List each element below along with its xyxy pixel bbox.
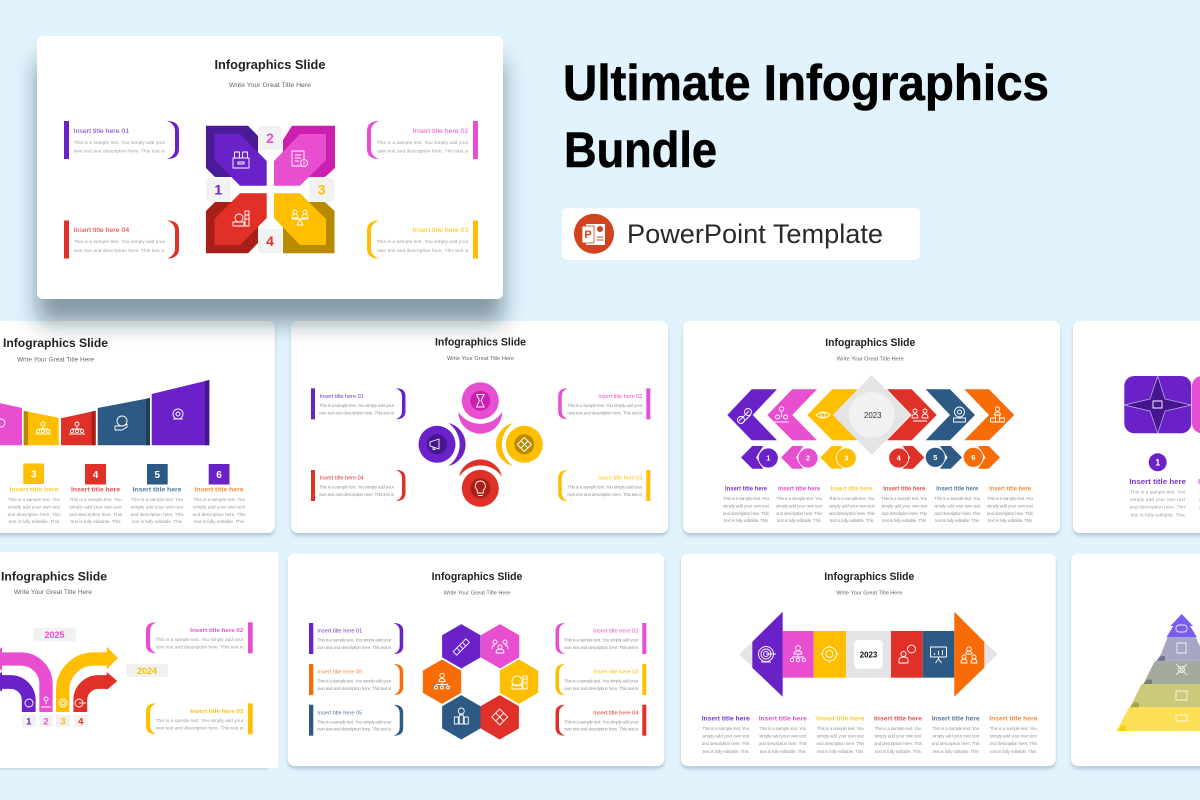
callout 01: This is a sample text. You simply add your (74, 140, 166, 145)
heading: crescent circles slide: Infographics Slide (435, 337, 526, 349)
step 1 with text: simply add your own text (1130, 497, 1186, 502)
six columns text: and description here. This (934, 511, 981, 516)
large chevrons (727, 389, 1014, 440)
heading: chevrons slide: Infographics Slide (825, 337, 915, 349)
callouts: hexagon slide right: own text and description here. This text is (564, 686, 639, 691)
steps 3 to 6: and description here. This (8, 512, 61, 517)
panel: crescent circles slide (291, 321, 668, 533)
callouts: curved arrows slide: This is a sample text. You simply add your (156, 637, 244, 642)
main title (563, 55, 1049, 178)
six columns text: This is a sample text. You (817, 726, 864, 731)
diagram: crescent circles (418, 382, 543, 507)
steps 3 to 6: text is fully editable. This (132, 519, 183, 524)
panel: hexagon ring slide (288, 554, 664, 766)
six columns text: text is fully editable. This (933, 749, 979, 754)
six columns text: simply add your own text (934, 504, 981, 508)
six columns text: Insert title here (831, 486, 873, 492)
steps 3 to 6: and description here. This (69, 512, 123, 517)
callout 03: Insert title here 03 (413, 227, 469, 234)
six columns text: simply add your own text (987, 504, 1034, 508)
number tiles 1 to 4: 4 (78, 716, 84, 728)
callouts: hexagon slide right: This is a sample text. You simply add your (564, 719, 639, 724)
six columns text: and description here. This (723, 511, 770, 516)
steps 3 to 6: text is fully editable. This (194, 519, 245, 524)
steps 3 to 6: and description here. This (192, 512, 246, 517)
steps 3 to 6: Insert title here (10, 486, 59, 494)
six columns text: text is fully editable. This (817, 749, 864, 754)
chart: stepped bars (0, 380, 209, 445)
callouts: crescent circles slide: This is a sample text. You simply add your (319, 403, 394, 408)
six columns text: Insert title here (936, 486, 979, 492)
subheading: hero slide: Write Your Great Title Here (229, 82, 311, 89)
six columns text: simply add your own text (776, 504, 823, 508)
six columns text: Insert title here (932, 716, 980, 723)
callouts: hexagon slide right: own text and description here. This text is (564, 645, 639, 650)
six columns text: text is fully editable. This (990, 749, 1037, 754)
callouts: hexagon slide left: This is a sample text. You simply add your (317, 719, 392, 724)
six columns text: and description here. This (829, 511, 875, 516)
six columns text (723, 486, 1034, 523)
step 1 with text: 1 (1155, 458, 1160, 468)
six columns text: This is a sample text. You (702, 726, 750, 731)
callouts: hexagon slide left: This is a sample text. You simply add your (317, 679, 392, 684)
panel: arrow band slide (681, 554, 1056, 766)
callouts: curved arrows slide: Insert title here 03 (190, 709, 244, 715)
panel: hero quadrant slide (37, 36, 503, 299)
callout 02 (367, 121, 478, 159)
panel: star tiles slide (cropped) (1073, 321, 1200, 533)
panel: chevrons 2023 slide (683, 321, 1060, 533)
six columns text: Insert title here (883, 486, 926, 492)
callouts: crescent circles slide: This is a sample text. You simply add your (319, 485, 394, 490)
six columns text: simply add your own text (990, 734, 1038, 739)
steps 3 to 6: and description here. This (130, 512, 184, 517)
callouts: hexagon slide right: Insert title here 02 (593, 629, 638, 635)
callouts: hexagon slide left: Insert title here 01 (317, 629, 362, 635)
six columns text: Insert title here (778, 486, 821, 492)
six columns text: and description here. This (702, 741, 750, 746)
six columns text: simply add your own text (932, 734, 980, 739)
six columns text: simply add your own text (829, 504, 875, 508)
small numbered chevrons: 3 (844, 454, 848, 463)
callouts: hexagon slide left: own text and description here. This text is (317, 727, 392, 732)
step 1 with text: This is a sample text. You (1130, 489, 1186, 494)
year diamond 2023: 2023 (864, 411, 882, 420)
six columns text: Insert title here (874, 716, 922, 723)
small numbered chevrons: 2 (806, 454, 810, 463)
six columns text: Insert title here (989, 486, 1032, 492)
six columns text: text is fully editable. This (724, 518, 769, 523)
callout 02: Insert title here 02 (413, 128, 469, 135)
callouts: crescent circles slide: Insert title here 01 (320, 394, 364, 400)
callouts: hexagon slide right: This is a sample text. You simply add your (564, 638, 639, 643)
steps 3 to 6: simply add your own text (70, 504, 122, 509)
year tags: 2025 (44, 630, 65, 640)
six columns text: and description here. This (759, 741, 807, 746)
callouts: crescent circles slide: Insert title here 02 (598, 394, 642, 400)
six columns text: This is a sample text. You (776, 496, 822, 501)
small numbered chevrons: 4 (897, 454, 902, 463)
callouts: crescent circles slide: This is a sample text. You simply add your (567, 485, 643, 490)
callouts: hexagon slide right: This is a sample text. You simply add your (564, 679, 639, 684)
small numbered chevrons: 1 (766, 454, 770, 463)
step 1 with text (1129, 453, 1200, 517)
callouts: crescent circles slide: Insert title here 03 (598, 476, 642, 482)
steps 3 to 6: Insert title here (194, 486, 244, 494)
small numbered chevrons: 5 (933, 453, 937, 462)
callouts: hexagon slide left (309, 623, 403, 736)
number tiles 1 to 4 (22, 715, 88, 728)
callout 03: This is a sample text. You simply add your (377, 239, 469, 244)
heading: curved arrows slide: Infographics Slide (1, 569, 107, 583)
callouts: curved arrows slide: own text and description here. This text is (156, 644, 244, 649)
six columns text: text is fully editable. This (875, 749, 922, 754)
callouts: crescent circles slide: own text and description here. This text is (567, 410, 643, 415)
callouts: curved arrows slide: own text and description here. This text is (156, 725, 244, 730)
six columns text: This is a sample text. You (932, 726, 980, 731)
six columns text: This is a sample text. You (934, 496, 981, 501)
six columns text: Insert title here (816, 716, 865, 723)
subheading: arrow band slide: Write Your Great Title Here (836, 590, 902, 596)
six columns text: This is a sample text. You (990, 726, 1037, 731)
badge label: PowerPoint Template (627, 219, 883, 249)
heading: stepped bars slide: Infographics Slide (3, 336, 108, 350)
six columns text: and description here. This (932, 741, 980, 746)
six columns text: This is a sample text. You (759, 726, 807, 731)
callouts: crescent circles slide: This is a sample text. You simply add your (567, 403, 643, 408)
callout 04: This is a sample text. You simply add your (74, 239, 166, 244)
number tiles 1 to 4 (206, 126, 334, 253)
callouts: hexagon slide right: own text and description here. This text is (564, 727, 639, 732)
callouts: hexagon slide right: Insert title here 03 (593, 670, 638, 676)
six columns text: text is fully editable. This (935, 518, 980, 523)
diagram: hexagon ring (423, 624, 538, 740)
year tags (33, 628, 168, 677)
heading: hexagon slide: Infographics Slide (432, 571, 522, 583)
callout 03: own text and description here. This text is (377, 248, 469, 253)
number tiles 1 to 4: 1 (214, 182, 222, 198)
number tiles 1 to 4: 2 (43, 716, 49, 728)
six columns text (702, 716, 1038, 754)
callouts: crescent circles slide: own text and description here. This text is (319, 492, 395, 497)
callout 04: own text and description here. This text is (74, 248, 165, 253)
six columns text: and description here. This (989, 741, 1038, 746)
icon: PowerPoint logo (574, 214, 614, 254)
six columns text: This is a sample text. You (723, 496, 769, 501)
six columns text: simply add your own text (702, 734, 750, 739)
six columns text: text is fully editable. This (703, 749, 749, 754)
callouts: crescent circles slide: own text and description here. This text is (567, 492, 643, 497)
badge: PowerPoint Template (562, 208, 920, 260)
number tiles 1 to 4: 4 (266, 233, 274, 249)
main title: Ultimate Infographics (563, 55, 1049, 111)
heading: arrow band slide: Infographics Slide (824, 571, 914, 583)
callout 02: own text and description here. This text is (377, 148, 469, 154)
subheading: chevrons slide: Write Your Great Title Here (837, 356, 904, 362)
steps 3 to 6: This is a sample text. You (8, 497, 60, 502)
step 1 with text: Insert title here (1129, 477, 1186, 486)
six columns text: This is a sample text. You (881, 496, 928, 501)
subheading: curved arrows slide: Write Your Great Title Here (14, 590, 93, 596)
six columns text: This is a sample text. You (829, 496, 875, 501)
six columns text: Insert title here (759, 716, 807, 723)
steps 3 to 6: 3 (31, 470, 37, 480)
six columns text: simply add your own text (881, 504, 928, 508)
six columns text: and description here. This (987, 511, 1034, 516)
year diamond 2023 (833, 375, 911, 455)
callouts: hexagon slide left: This is a sample text. You simply add your (317, 638, 392, 643)
callout 04 (64, 220, 179, 258)
six columns text: simply add your own text (817, 734, 865, 739)
callout 03 (367, 220, 478, 258)
year tags: 2024 (137, 666, 157, 676)
callout 04: Insert title here 04 (74, 227, 130, 234)
number tiles 1 to 4: 1 (26, 716, 32, 728)
subheading: hexagon slide: Write Your Great Title Here (444, 590, 510, 596)
pyramid chart (1117, 614, 1200, 731)
six columns text: Insert title here (702, 716, 750, 723)
small numbered chevrons (741, 446, 1000, 469)
steps 3 to 6: This is a sample text. You (70, 497, 122, 502)
steps 3 to 6: This is a sample text. You (193, 497, 245, 502)
six columns text: and description here. This (881, 511, 928, 516)
star tile: purple (1124, 376, 1200, 433)
callouts: curved arrows slide (146, 622, 253, 734)
callouts: hexagon slide left: own text and description here. This text is (317, 686, 392, 691)
six columns text: text is fully editable. This (988, 518, 1033, 523)
six columns text: simply add your own text (723, 504, 770, 508)
panel: stepped bars slide (0, 321, 275, 533)
number tiles 1 to 4: 3 (318, 182, 326, 198)
heading: hero slide: Infographics Slide (214, 57, 326, 72)
six columns text: simply add your own text (874, 734, 922, 739)
six columns text: Insert title here (725, 486, 768, 492)
number tiles 1 to 4: 3 (60, 716, 66, 728)
steps 3 to 6: This is a sample text. You (131, 497, 183, 502)
callouts: crescent circles slide (311, 388, 650, 501)
callouts: hexagon slide left: Insert title here 05 (317, 710, 362, 716)
steps 3 to 6: text is fully editable. This (70, 519, 121, 524)
icon: PowerPoint logo: P (584, 229, 592, 241)
callouts: crescent circles slide: own text and description here. This text is (319, 410, 395, 415)
curved arrows chart (0, 647, 118, 712)
steps 3 to 6: 5 (155, 470, 161, 481)
main title: Bundle (564, 122, 717, 178)
callouts: hexagon slide left: own text and description here. This text is (317, 645, 392, 650)
double arrow band (739, 612, 998, 697)
steps 3 to 6: simply add your own text (8, 504, 61, 509)
callout 01 (64, 121, 179, 159)
steps 3 to 6: 6 (216, 470, 222, 481)
subheading: crescent circles slide: Write Your Great Title Here (447, 356, 514, 362)
steps 3 to 6: Insert title here (71, 486, 120, 494)
callout 02: This is a sample text. You simply add your (377, 140, 469, 145)
double arrow band: 2023 (860, 650, 878, 659)
panel: curved arrows slide (0, 552, 278, 770)
callout 01: Insert title here 01 (74, 128, 130, 135)
step 1 with text: text is fully editable. This (1131, 512, 1185, 517)
steps 3 to 6: Insert title here (132, 486, 182, 494)
six columns text: This is a sample text. You (874, 726, 922, 731)
six columns text: and description here. This (874, 741, 923, 746)
callouts: crescent circles slide: Insert title here 04 (320, 476, 364, 482)
six columns text: text is fully editable. This (830, 518, 874, 523)
callouts: hexagon slide left: Insert title here 06 (317, 670, 362, 676)
six columns text: simply add your own text (759, 734, 807, 739)
six columns text: text is fully editable. This (777, 518, 822, 523)
steps 3 to 6: 4 (93, 470, 99, 481)
subheading: stepped bars slide: Write Your Great Title Here (17, 358, 95, 364)
callouts: hexagon slide right: Insert title here 04 (593, 710, 638, 716)
small numbered chevrons: 6 (971, 453, 975, 462)
step 1 with text: and description here. This (1130, 505, 1186, 510)
six columns text: and description here. This (776, 511, 823, 516)
steps 3 to 6: simply add your own text (193, 504, 246, 509)
callouts: hexagon slide right (556, 623, 646, 736)
steps 3 to 6: simply add your own text (131, 504, 184, 509)
steps 3 to 6: text is fully editable. This (9, 519, 60, 524)
number tiles 1 to 4: 2 (266, 130, 274, 146)
six columns text: text is fully editable. This (760, 749, 806, 754)
panel: pyramid slide (cropped) (1071, 554, 1200, 766)
steps 3 to 6 (8, 464, 246, 524)
callouts: curved arrows slide: Insert title here 02 (190, 628, 243, 634)
diagram: four quadrants (206, 126, 335, 253)
six columns text: This is a sample text. You (987, 496, 1033, 501)
six columns text: and description here. This (816, 741, 865, 746)
callouts: curved arrows slide: This is a sample text. You simply add your (156, 718, 244, 723)
six columns text: text is fully editable. This (882, 518, 927, 523)
callout 01: own text and description here. This text is (74, 148, 165, 154)
six columns text: Insert title here (989, 716, 1038, 723)
